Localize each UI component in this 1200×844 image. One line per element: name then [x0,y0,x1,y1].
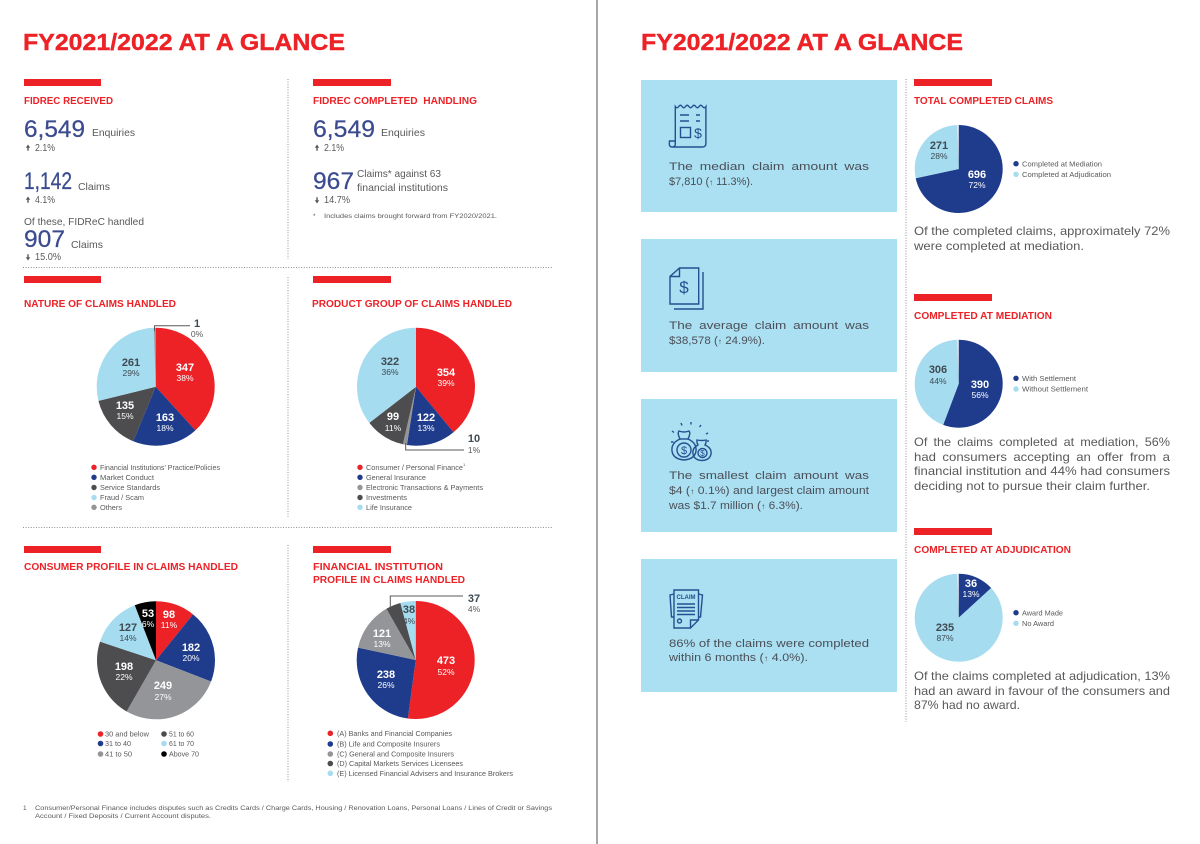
pie labels: 15% [116,411,134,421]
text: $7,810 (↑ 11.3%). [669,176,753,188]
panel: completed at mediation [914,294,1170,493]
legend [98,730,199,758]
pie labels: 53 [142,608,154,620]
legend [1013,159,1111,179]
pie labels: 322 [381,356,399,368]
text [669,320,870,347]
icon: money bags [671,422,711,460]
text [914,435,1170,493]
legend: General Insurance [366,473,426,482]
pie labels [936,578,980,643]
pie labels: 98 [163,609,175,621]
legend: Electronic Transactions & Payments [366,483,483,492]
legend: 1 [463,462,466,467]
panel: FIDReC received: Of these, FIDReC handled [24,216,144,228]
legend: Fraud / Scam [100,493,144,502]
panel: FIDReC received: Enquiries [92,127,135,139]
pie labels: 4% [403,616,416,626]
panel: total completed claims [913,79,1170,253]
panel: FIDReC completed handling: Includes claims brought forward from FY2020/2021. [324,213,497,220]
footnote: 1 [23,805,27,812]
panel: smallest and largest claim amount [641,399,897,532]
panel: FIDReC received: 15.0% [35,252,61,263]
title: left page: FY2021/2022 AT A GLANCE [23,29,345,55]
text: The smallest claim amount was [669,470,870,482]
panel: total completed claims: TOTAL COMPLETED CLAIMS [914,96,1053,107]
pie chart: consumer profile [126,631,186,690]
pie labels: 11% [385,423,402,433]
callout: others [154,318,204,339]
pie labels: 696 [968,169,986,181]
legend: 51 to 60 [169,730,194,738]
text: were completed at mediation. [913,239,1084,253]
callout: electronic transactions: 1% [468,445,481,455]
pie labels: 249 [154,680,172,692]
legend: Consumer / Personal Finance [366,463,463,472]
pie labels: 18% [156,423,174,433]
pie labels: 44% [929,376,947,386]
footnote: Account / Fixed Deposits / Current Account disputes. [35,813,211,820]
pie labels: 271 [930,140,948,152]
callout: others: 1 [194,318,200,330]
icon: money bags: $ [681,445,687,457]
panel: FIDReC completed handling: FIDREC COMPLETED HANDLING [313,96,477,107]
text: $38,578 ( ↑ 24.9%). [669,335,765,347]
panel: completed at mediation: COMPLETED AT MEDIATION [914,311,1052,322]
footnote: Consumer/Personal Finance includes disputes such as Credits Cards / Charge Cards, Housing / Renovation Loans, Personal Loans / Lines of Credit or Savings [35,805,553,812]
icon: document with dollar [670,268,703,309]
panel: FIDReC received: 6,549 [24,116,85,143]
pie labels: 14% [119,633,137,643]
legend: Life Insurance [366,503,412,512]
panel: nature of claims handled: NATURE OF CLAIMS HANDLED [24,299,176,310]
callout: capital markets [390,593,481,614]
legend: (D) Capital Markets Services Licensees [337,759,463,768]
legend: 41 to 50 [105,750,132,758]
panel: FIDReC completed handling: Enquiries [381,127,425,139]
icon: claim form: CLAIM [676,595,696,601]
text: within 6 months ( ↑ 4.0%). [668,652,808,664]
pie chart: adjudication [937,596,981,640]
callout: electronic transactions: 10 [468,433,480,445]
pie labels [373,604,455,690]
pie labels: 121 [373,628,391,640]
pie labels: 122 [417,412,435,424]
panel: FIDReC completed handling: Claims* against 63 [357,168,441,180]
legend: Investments [366,493,407,502]
panel: FIDReC received: FIDREC RECEIVED [24,96,113,107]
text: The average claim amount was [669,320,870,332]
pie labels: 26% [377,680,395,690]
pie labels: 135 [116,400,134,412]
text [914,669,1170,712]
legend: (E) Licensed Financial Advisers and Insurance Brokers [337,769,513,778]
panel: consumer profile in claims handled: CONSUMER PROFILE IN CLAIMS HANDLED [24,562,238,573]
pie labels: 36 [965,578,977,590]
text: had consumers accepting an offer from a [914,450,1170,464]
text [668,638,869,664]
pie labels: 27% [154,692,172,702]
pie labels [929,364,989,400]
legend: Completed at Adjudication [1022,170,1111,179]
icon: receipt: $ [694,125,702,141]
pie labels [930,140,986,190]
pie labels: 261 [122,357,140,369]
pie labels: 29% [122,368,140,378]
panel: FIDReC received: 1,142 [24,168,72,195]
text: had an award in favour of the consumers and [914,684,1170,698]
text: financial institution and 44% had consumers [914,464,1170,478]
legend: (B) Life and Composite Insurers [337,740,440,748]
panel: FIDReC received: 4.1% [35,195,55,206]
text: deciding not to pursue their claim further. [914,479,1150,493]
pie labels: 13% [417,423,435,433]
panel: financial institution profile in claims handled: FINANCIAL INSTITUTION [313,562,443,573]
pie chart: financial institution profile [386,630,445,690]
legend: 61 to 70 [169,739,194,748]
text [913,224,1170,253]
callout: capital markets: 37 [468,593,480,605]
callout: electronic transactions [406,433,481,455]
panel: completed at adjudication: COMPLETED AT ADJUDICATION [914,545,1071,556]
pie labels: 390 [971,379,989,391]
pie labels: 163 [156,412,174,424]
legend: No Award [1022,619,1054,628]
pie labels: 6% [142,619,155,629]
pie labels: 347 [176,362,194,374]
legend: Completed at Mediation [1022,159,1102,168]
pie labels: 238 [377,669,395,681]
pie labels: 22% [115,672,133,682]
legend [357,462,483,512]
pie labels [116,357,194,433]
legend: Service Standards [100,483,160,492]
pie chart: product group [386,357,446,416]
legend: (A) Banks and Financial Companies [337,729,452,738]
pie labels [115,608,200,702]
icon: receipt [669,105,706,147]
panel: FIDReC completed handling: financial institutions [357,182,448,194]
pie labels: 39% [437,378,455,388]
panel: FIDReC completed handling: * [313,213,316,220]
legend [1013,608,1063,628]
pie labels: 72% [968,180,986,190]
pie labels: 127 [119,622,137,634]
icon: document with dollar: $ [679,278,689,297]
panel: FIDReC received: 907 [24,226,65,253]
pie chart: mediation [937,362,981,406]
panel: completed at adjudication [914,528,1170,712]
pie labels: 306 [929,364,947,376]
panel: financial institution profile in claims handled: PROFILE IN CLAIMS HANDLED [313,575,465,586]
panel: FIDReC completed handling: 6,549 [313,116,375,143]
pie labels [381,356,456,433]
pie labels: 56% [971,390,989,400]
title: right page: FY2021/2022 AT A GLANCE [641,29,963,55]
text: The median claim amount was [669,161,870,173]
panel: average claim amount [641,239,897,372]
icon: money bags: $ [700,449,705,458]
pie labels: 13% [373,639,391,649]
legend: Above 70 [169,750,199,758]
panel: FIDReC received: 2.1% [35,143,55,154]
legend: 30 and below [105,730,150,738]
legend [91,463,220,512]
panel: nature of claims handled [24,276,220,512]
legend: Award Made [1022,608,1063,617]
text [668,470,870,512]
legend: Market Conduct [100,473,154,482]
panel: consumer profile in claims handled [24,546,238,758]
pie labels: 87% [936,633,954,643]
text: Of the claims completed at adjudication, 13% [914,669,1170,683]
icon: claim form [670,590,702,628]
pie labels: 38% [176,373,194,383]
pie labels: 198 [115,661,133,673]
panel: financial institution profile in claims handled [313,546,513,778]
panel: claims completed within 6 months [641,559,897,692]
text: $4 ( ↑ 0.1%) and largest claim amount [669,485,869,497]
panel: FIDReC received [24,79,144,263]
legend: With Settlement [1022,374,1076,383]
legend: 31 to 40 [105,739,131,748]
pie labels: 182 [182,642,200,654]
text: Of the claims completed at mediation, 56% [914,435,1170,449]
panel: FIDReC completed handling [313,79,497,220]
pie labels: 11% [161,620,178,630]
pie labels: 20% [182,653,200,663]
pie labels: 36% [381,367,399,377]
pie chart: nature of claims [126,357,185,416]
legend: Without Settlement [1022,384,1088,394]
callout: capital markets: 4% [468,604,481,614]
panel: product group of claims handled: PRODUCT GROUP OF CLAIMS HANDLED [312,299,512,310]
text: 87% had no award. [914,698,1020,712]
pie labels: 99 [387,411,399,423]
footnote [23,805,553,820]
panel: product group of claims handled [312,276,512,512]
pie labels: 473 [437,655,455,667]
legend: Financial Institutions' Practice/Policies [100,463,220,472]
text: 86% of the claims were completed [669,638,869,650]
pie labels: 235 [936,622,954,634]
legend: (C) General and Composite Insurers [337,750,454,758]
pie chart: total completed [937,147,981,191]
text: was $1.7 million ( ↑ 6.3%). [668,500,803,512]
pie labels: 28% [930,151,948,161]
panel: median claim amount [641,80,897,212]
text [669,161,870,188]
legend [328,729,513,778]
panel: FIDReC completed handling: 967 [313,168,354,195]
pie labels: 13% [962,589,980,599]
legend: Others [100,503,122,512]
callout: others: 0% [191,329,204,339]
legend [1013,374,1088,394]
text: Of the completed claims, approximately 72% [914,224,1170,238]
pie labels: 354 [437,367,456,379]
panel: FIDReC received: Claims [71,239,103,251]
panel: FIDReC received: Claims [78,181,110,193]
pie labels: 38 [403,604,415,616]
panel: FIDReC completed handling: 14.7% [324,195,350,206]
pie labels: 52% [437,667,455,677]
panel: FIDReC completed handling: 2.1% [324,143,344,154]
